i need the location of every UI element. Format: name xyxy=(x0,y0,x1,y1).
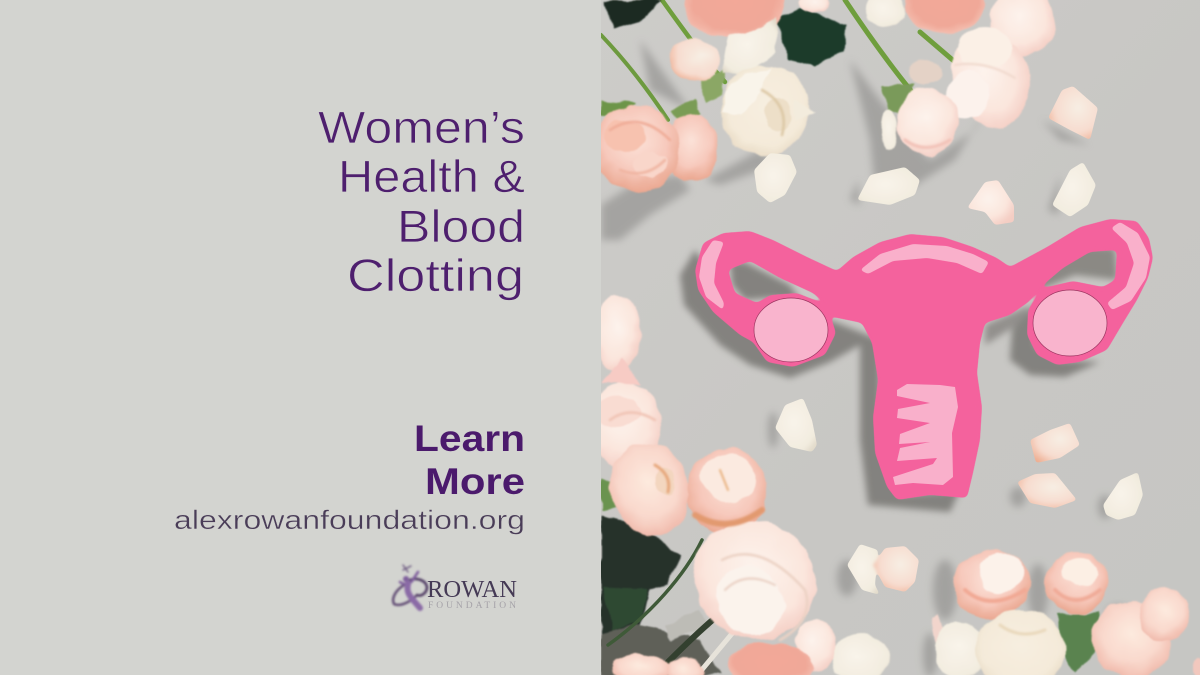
call to action: learn more: Learn xyxy=(414,418,525,459)
uterus body xyxy=(695,219,1153,500)
photo background xyxy=(601,0,1200,675)
roses: top group xyxy=(592,0,1055,191)
icon: dancing figure swirl xyxy=(393,565,427,608)
lower canal folds xyxy=(893,384,958,485)
logo: Rowan Foundation xyxy=(393,565,517,611)
left ovary xyxy=(754,298,828,362)
panel: flower photo xyxy=(589,0,1200,675)
call to action: learn more: More xyxy=(425,461,525,502)
loose petals xyxy=(754,86,1143,595)
right ovary xyxy=(1033,290,1107,356)
title: Health & xyxy=(338,151,525,202)
top arc highlight xyxy=(860,244,989,274)
roses: bottom-right group xyxy=(930,541,1200,675)
roses: left and bottom-left group xyxy=(589,296,888,675)
stems xyxy=(601,0,955,120)
left tube highlight xyxy=(699,240,724,310)
title: Blood xyxy=(397,201,525,252)
website address: alexrowanfoundation.org xyxy=(174,505,525,535)
uterus shadow xyxy=(680,245,1118,512)
logo wordmark: ROWAN xyxy=(427,576,517,603)
title: Women’s xyxy=(318,102,525,153)
stems: lower left xyxy=(608,540,735,672)
call to action: learn more xyxy=(414,418,525,502)
left panel background xyxy=(0,0,601,675)
rose petal creases and orange accents xyxy=(610,64,1100,640)
logo tagline: FOUNDATION xyxy=(428,601,516,611)
dark leaves xyxy=(601,0,1100,675)
title: Clotting xyxy=(347,250,524,301)
icon: paper uterus xyxy=(680,219,1153,512)
flower shadows xyxy=(601,40,1130,675)
right tube highlight xyxy=(1107,222,1150,310)
title xyxy=(318,102,525,301)
